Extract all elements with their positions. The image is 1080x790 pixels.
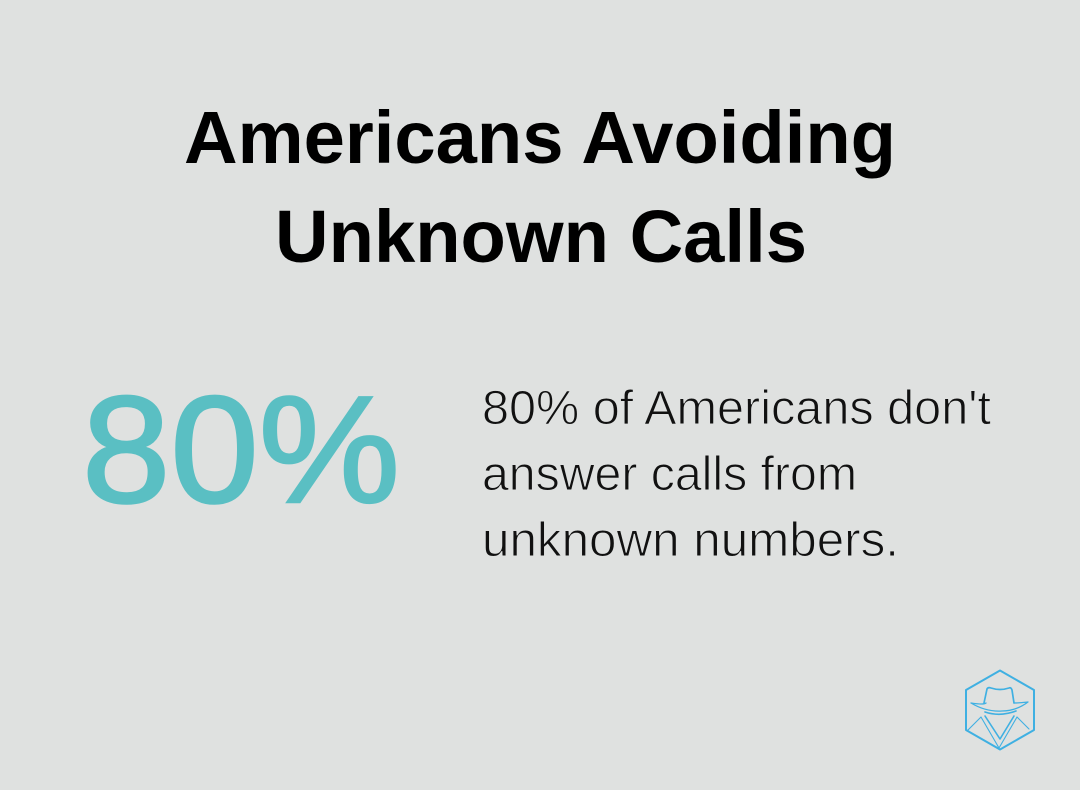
description text: answer calls from bbox=[482, 448, 857, 501]
icon: hexagon logo with hat-wearing spy bbox=[966, 670, 1034, 750]
big statistic: 80%: 80% bbox=[82, 365, 400, 535]
title bbox=[184, 96, 896, 278]
description text: unknown numbers. bbox=[482, 514, 899, 567]
title: Unknown Calls bbox=[275, 195, 807, 278]
description text bbox=[482, 382, 991, 567]
title: Americans Avoiding bbox=[184, 96, 896, 179]
description text: 80% of Americans don't bbox=[482, 382, 991, 435]
